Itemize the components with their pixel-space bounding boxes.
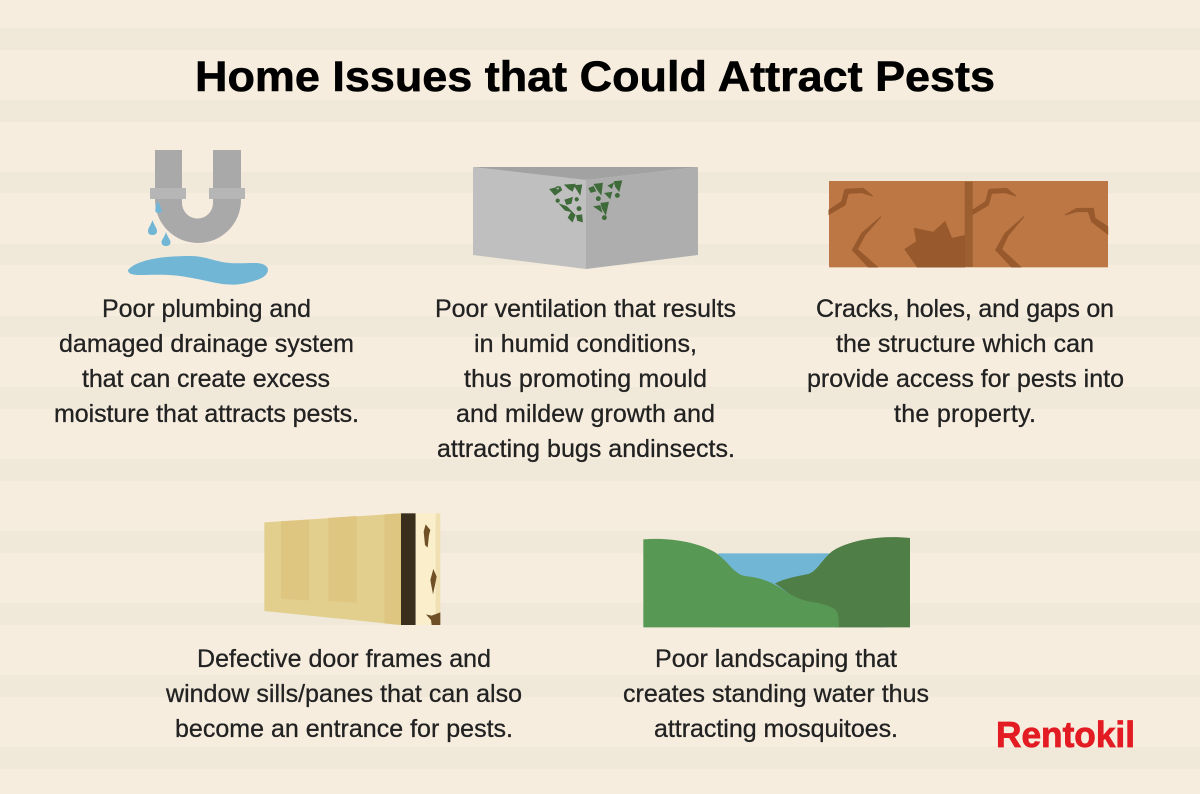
icon: landscape with standing water: [643, 537, 910, 627]
text: cracks: the property.: [894, 400, 1036, 428]
icon: cracked wall: [829, 181, 1108, 267]
panel: defective door frames: [165, 513, 522, 743]
icon: damaged door frame: [264, 513, 440, 625]
text: landscaping: Poor landscaping that: [655, 645, 897, 673]
text: cracks: Cracks, holes, and gaps on: [816, 295, 1114, 323]
text: landscaping: attracting mosquitoes.: [654, 715, 898, 743]
text: plumbing: Poor plumbing and: [102, 295, 311, 323]
text: door frames: become an entrance for pests.: [175, 715, 513, 743]
text: plumbing: [54, 295, 359, 428]
text: door frames: window sills/panes that can also: [165, 680, 522, 708]
icon: leaking pipe: [128, 150, 268, 285]
text: cracks: the structure which can: [836, 330, 1094, 358]
text: cracks: [807, 295, 1124, 428]
text: plumbing: that can create excess: [82, 365, 330, 393]
text: cracks: provide access for pests into: [807, 365, 1124, 393]
text: ventilation: Poor ventilation that results: [435, 295, 736, 323]
panel: poor ventilation: [435, 167, 736, 463]
panel: cracks and holes: [807, 181, 1124, 428]
text: ventilation: in humid conditions,: [474, 330, 697, 358]
text: ventilation: [435, 295, 736, 463]
text: landscaping: [623, 645, 929, 743]
text: ventilation: thus promoting mould: [464, 365, 707, 393]
text: door frames: Defective door frames and: [197, 645, 491, 673]
text: plumbing: moisture that attracts pests.: [54, 400, 359, 428]
icon: mouldy wall corner: [473, 167, 698, 269]
panel: poor plumbing: [54, 150, 359, 428]
title: Home Issues that Could Attract Pests: [195, 53, 995, 101]
text: door frames: [165, 645, 522, 743]
panel: poor landscaping: [623, 537, 929, 743]
text: landscaping: creates standing water thus: [623, 680, 929, 708]
text: ventilation: and mildew growth and: [456, 400, 715, 428]
text: ventilation: attracting bugs andinsects.: [437, 435, 735, 463]
logo: Rentokil: Rentokil: [996, 714, 1135, 755]
text: plumbing: damaged drainage system: [59, 330, 354, 358]
